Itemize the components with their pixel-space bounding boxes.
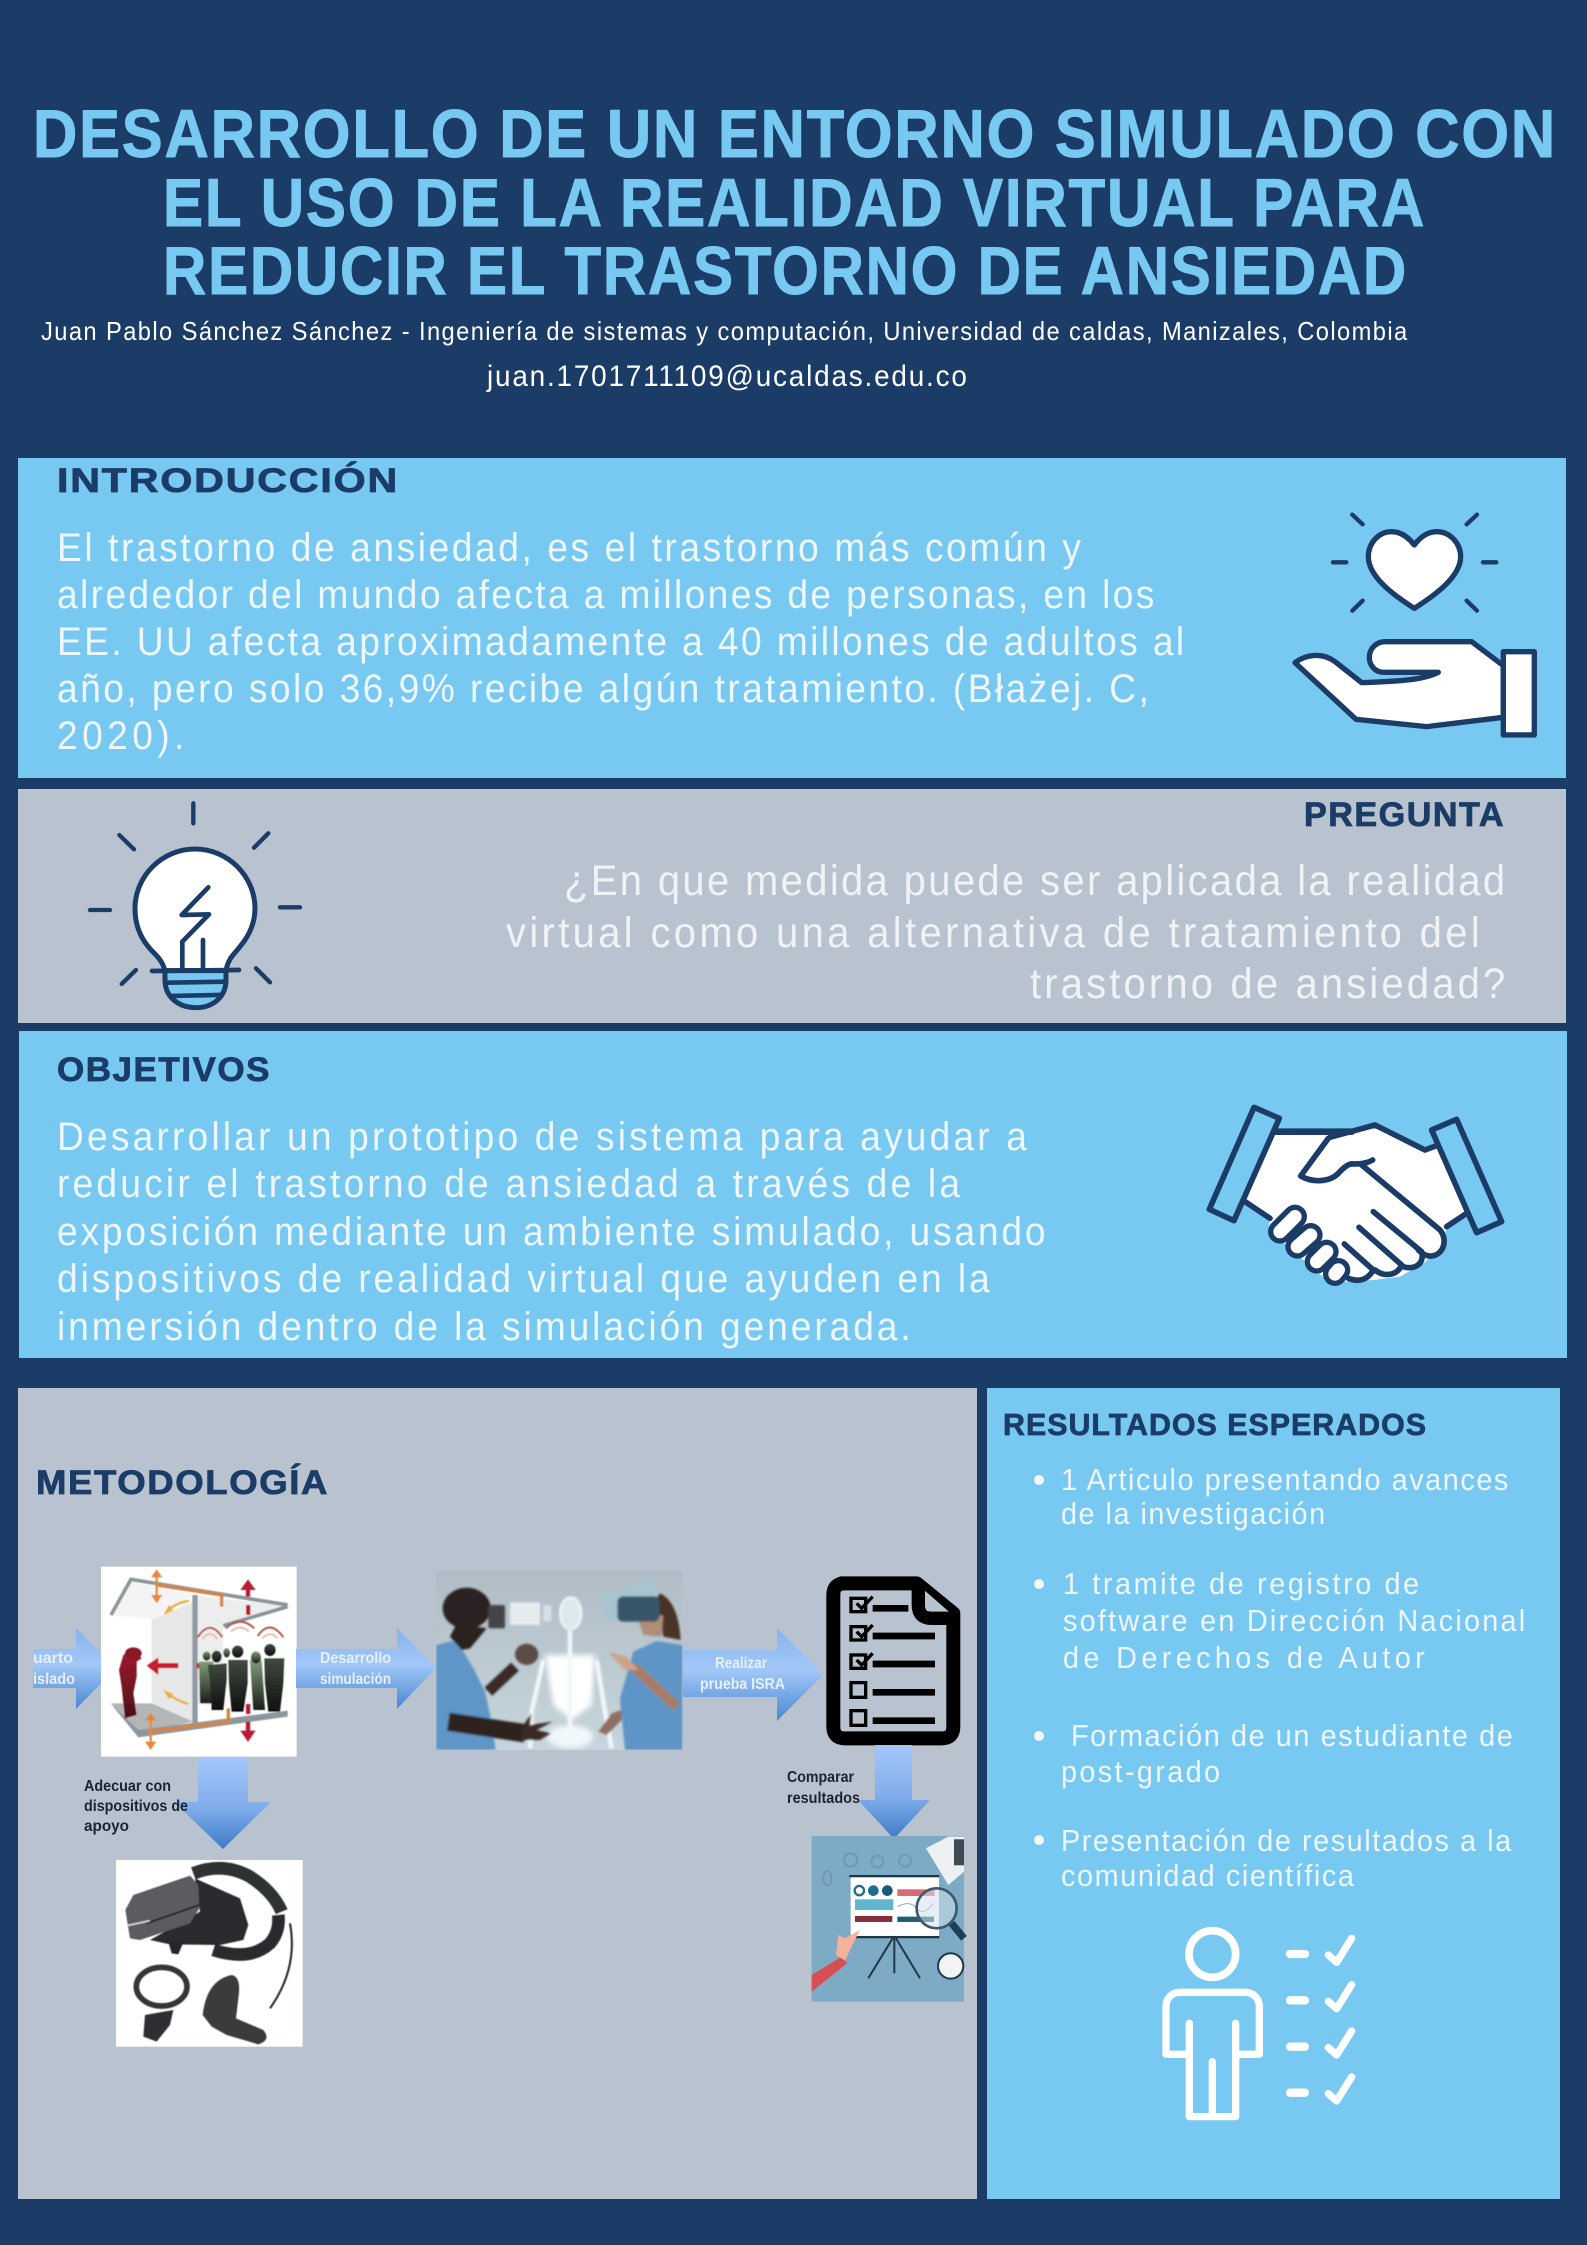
image: isolated room bbox=[101, 1567, 297, 1757]
title bbox=[33, 96, 1557, 309]
list: expected results: software en Dirección Nacional bbox=[1063, 1604, 1525, 1638]
arrow: comparar resultados bbox=[858, 1745, 930, 1839]
objectives text: exposición mediante un ambiente simulado, usando bbox=[57, 1210, 1046, 1254]
icon: light bulb bbox=[90, 803, 300, 1008]
objectives text bbox=[57, 1115, 1046, 1349]
arrow: realizar prueba ISRA: prueba ISRA bbox=[700, 1676, 785, 1693]
objectives text: reducir el trastorno de ansiedad a través de la bbox=[57, 1162, 961, 1206]
flow diagram bbox=[33, 1567, 964, 2047]
title: REDUCIR EL TRASTORNO DE ANSIEDAD bbox=[163, 233, 1408, 309]
label: adecuar con dispositivos de apoyo: Adecuar con bbox=[84, 1778, 171, 1795]
label: comparar resultados: Comparar bbox=[787, 1769, 854, 1786]
objectives text: dispositivos de realidad virtual que ayuden en la bbox=[57, 1257, 990, 1301]
image: virtual reality medical scene bbox=[436, 1571, 683, 1750]
question text: virtual como una alternativa de tratamiento del bbox=[506, 908, 1480, 956]
panel: objetivos bbox=[19, 1031, 1567, 1358]
heading: metodología: METODOLOGÍA bbox=[36, 1464, 329, 1502]
list: expected results bbox=[1034, 1463, 1525, 1893]
arrow: cuarto aislado bbox=[33, 1628, 116, 1709]
title: EL USO DE LA REALIDAD VIRTUAL PARA bbox=[163, 165, 1426, 241]
arrow: adecuar dispositivos bbox=[174, 1757, 271, 1849]
heading: resultados esperados: RESULTADOS ESPERADOS bbox=[1003, 1407, 1427, 1442]
image: VR headset and controllers bbox=[116, 1860, 303, 2047]
author line: Juan Pablo Sánchez Sánchez - Ingeniería de sistemas y computación, Universidad de caldas, Manizales, Colombia bbox=[41, 318, 1407, 346]
question text: trastorno de ansiedad? bbox=[1030, 959, 1505, 1007]
panel: pregunta bbox=[18, 789, 1566, 1023]
image: results presentation board bbox=[812, 1836, 964, 2002]
question text: ¿En que medida puede ser aplicada la realidad bbox=[564, 856, 1505, 904]
label: adecuar con dispositivos de apoyo: apoyo bbox=[84, 1818, 129, 1835]
arrow: cuarto aislado: islado bbox=[33, 1671, 75, 1688]
list: expected results: 1 Articulo presentando avances bbox=[1061, 1463, 1508, 1497]
heading: introducción: INTRODUCCIÓN bbox=[57, 462, 399, 500]
intro text bbox=[57, 526, 1184, 758]
label: adecuar con dispositivos de apoyo: dispositivos de bbox=[84, 1798, 188, 1815]
intro text: EE. UU afecta aproximadamente a 40 millones de adultos al bbox=[57, 620, 1184, 664]
list: expected results: de Derechos de Autor bbox=[1063, 1641, 1425, 1675]
intro text: El trastorno de ansiedad, es el trastorno más común y bbox=[57, 526, 1082, 570]
label: comparar resultados bbox=[787, 1769, 860, 1807]
arrow: desarrollo simulación bbox=[296, 1628, 436, 1709]
arrow: desarrollo simulación: Desarrollo bbox=[320, 1650, 391, 1667]
list: expected results: comunidad científica bbox=[1061, 1859, 1354, 1893]
arrow: realizar prueba ISRA: Realizar bbox=[715, 1655, 767, 1672]
icon: handshake bbox=[1209, 1107, 1502, 1282]
list: expected results: Formación de un estudiante de bbox=[1071, 1719, 1513, 1753]
intro text: 2020). bbox=[57, 714, 184, 758]
list: expected results: Presentación de resultados a la bbox=[1061, 1824, 1511, 1858]
intro text: año, pero solo 36,9% recibe algún tratamiento. (Błażej. C, bbox=[57, 667, 1149, 711]
label: adecuar con dispositivos de apoyo bbox=[84, 1778, 188, 1835]
objectives text: Desarrollar un prototipo de sistema para ayudar a bbox=[57, 1115, 1027, 1159]
arrow: desarrollo simulación: simulación bbox=[320, 1671, 391, 1688]
heading: pregunta: PREGUNTA bbox=[1304, 796, 1505, 834]
panel: introducción bbox=[18, 458, 1566, 778]
list: expected results: 1 tramite de registro de bbox=[1063, 1567, 1419, 1601]
panel: metodología bbox=[18, 1388, 977, 2199]
question text bbox=[506, 856, 1505, 1007]
icon: hand holding heart bbox=[1295, 515, 1534, 735]
arrow: cuarto aislado: uarto bbox=[33, 1650, 73, 1667]
email: juan.1701711109@ucaldas.edu.co bbox=[486, 360, 967, 393]
label: comparar resultados: resultados bbox=[787, 1790, 860, 1807]
intro text: alrededor del mundo afecta a millones de personas, en los bbox=[57, 573, 1154, 617]
list: expected results: post-grado bbox=[1061, 1755, 1220, 1789]
list: expected results: de la investigación bbox=[1061, 1497, 1325, 1531]
objectives text: inmersión dentro de la simulación generada. bbox=[57, 1305, 911, 1349]
heading: objetivos: OBJETIVOS bbox=[57, 1051, 271, 1089]
panel: resultados esperados bbox=[987, 1388, 1560, 2199]
icon: person with checklist bbox=[1166, 1931, 1352, 2117]
icon: checklist document bbox=[833, 1583, 957, 1738]
arrow: realizar prueba ISRA bbox=[683, 1628, 823, 1721]
